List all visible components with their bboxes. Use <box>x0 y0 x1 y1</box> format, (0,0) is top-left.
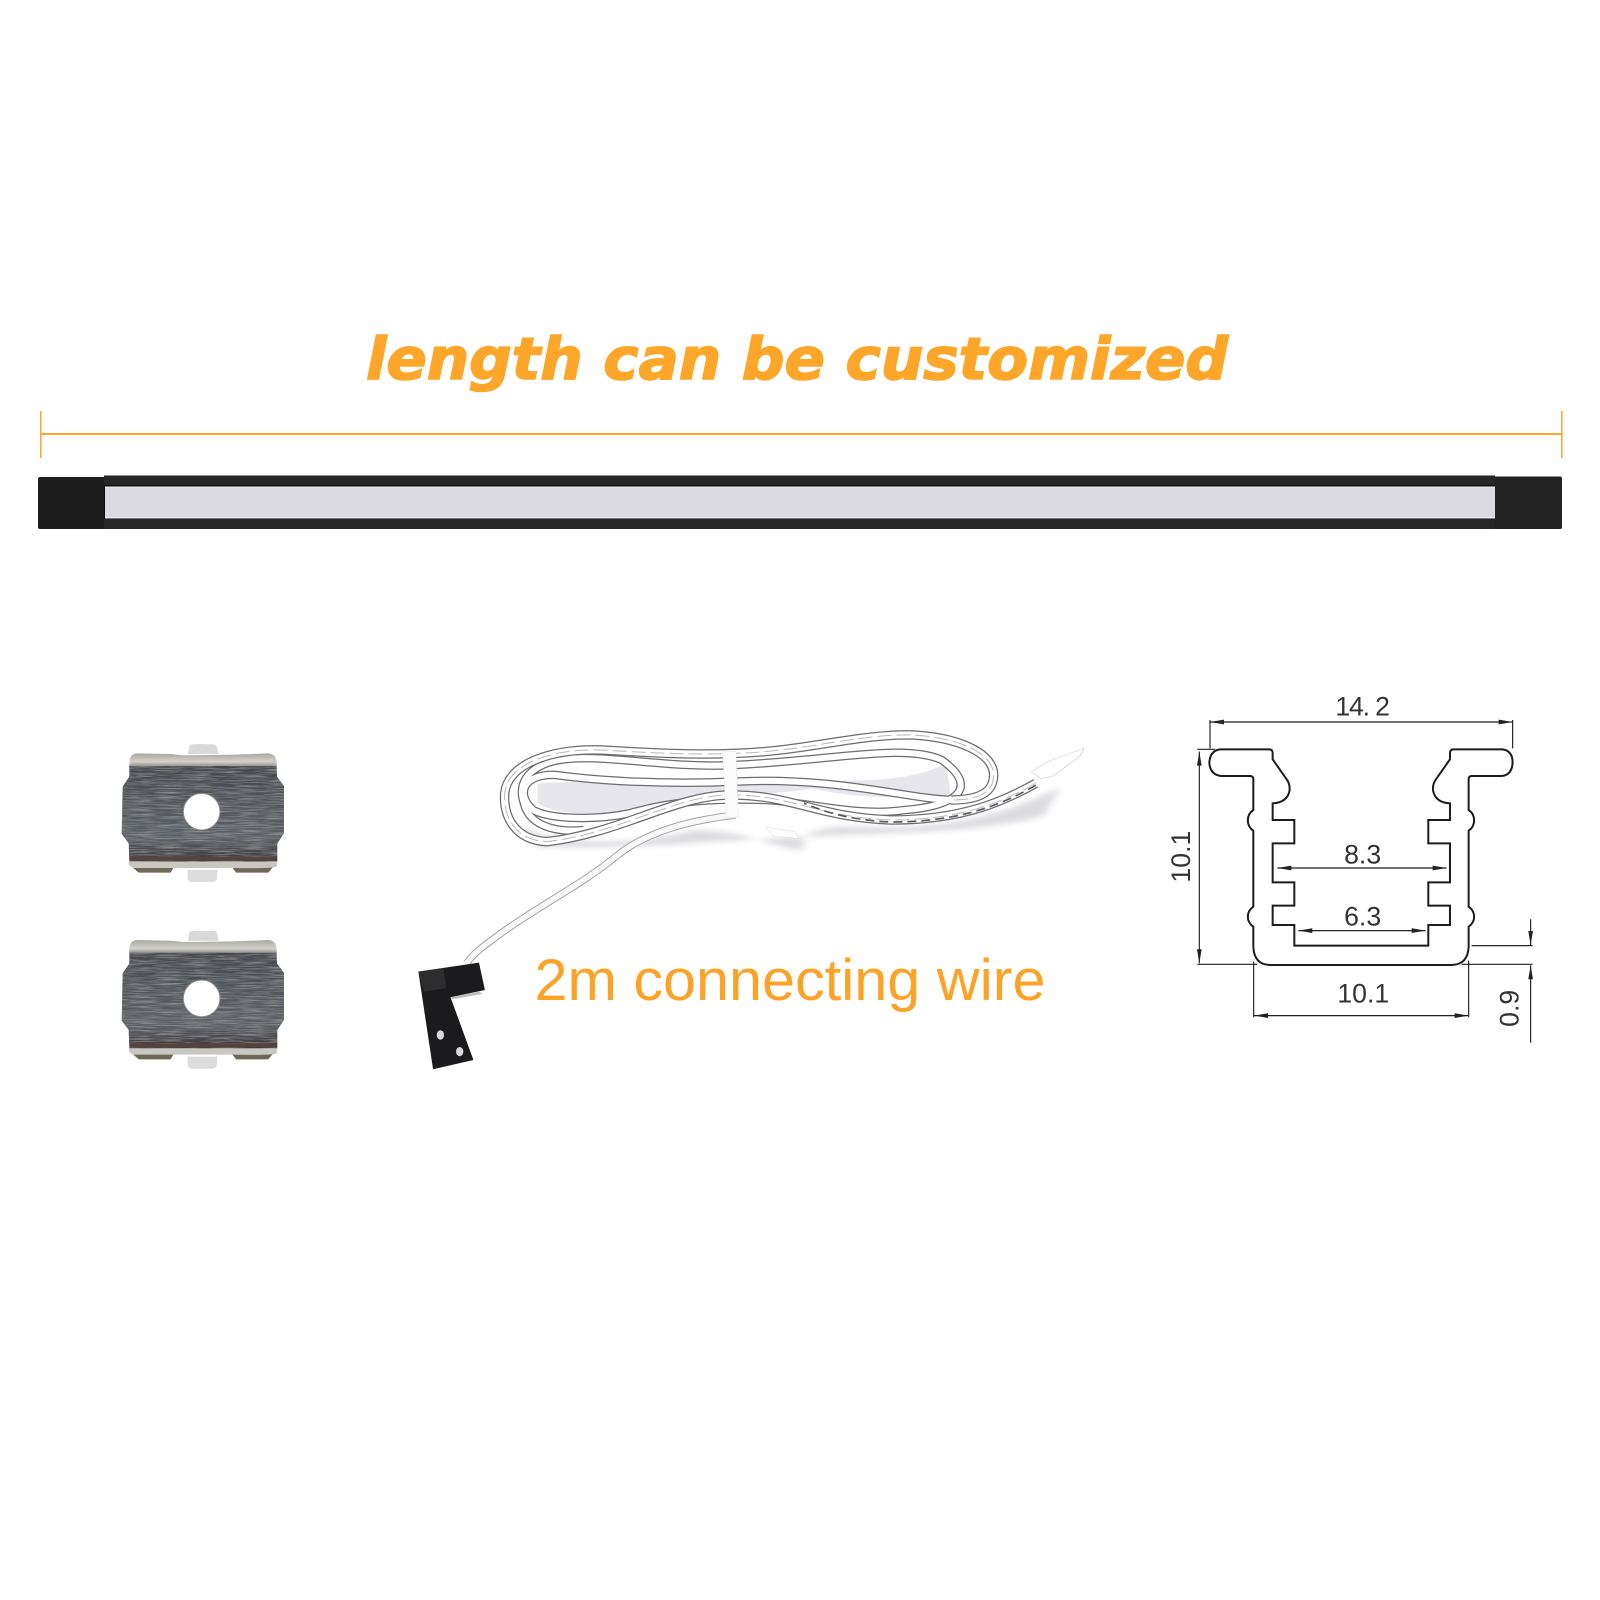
length dimension line <box>40 411 1562 458</box>
dimension labels: 8.3 <box>1344 839 1381 869</box>
dimension labels <box>1166 692 1524 1027</box>
profile outline <box>1209 749 1513 965</box>
mounting clip 1 <box>122 744 284 882</box>
dimension labels: 10.1 <box>1337 978 1389 1008</box>
mounting clip 2 <box>122 931 284 1069</box>
wire label: 2m connecting wire <box>534 948 1046 1013</box>
connecting wire <box>418 735 1084 1069</box>
cable tie <box>723 752 738 818</box>
LED light bar <box>38 476 1562 529</box>
small plug <box>765 827 798 838</box>
dimension labels: 6.3 <box>1344 902 1381 932</box>
wire tail <box>467 815 735 963</box>
end plug <box>1031 748 1084 778</box>
dimension labels: 10.1 <box>1166 831 1196 883</box>
black connector <box>418 963 485 1069</box>
title: length can be customized <box>366 325 1228 393</box>
dimension labels: 14. 2 <box>1335 692 1390 722</box>
dimension lines <box>1197 720 1533 1043</box>
cross-section dimension drawing <box>1166 692 1533 1043</box>
dimension labels: 0.9 <box>1494 990 1524 1027</box>
